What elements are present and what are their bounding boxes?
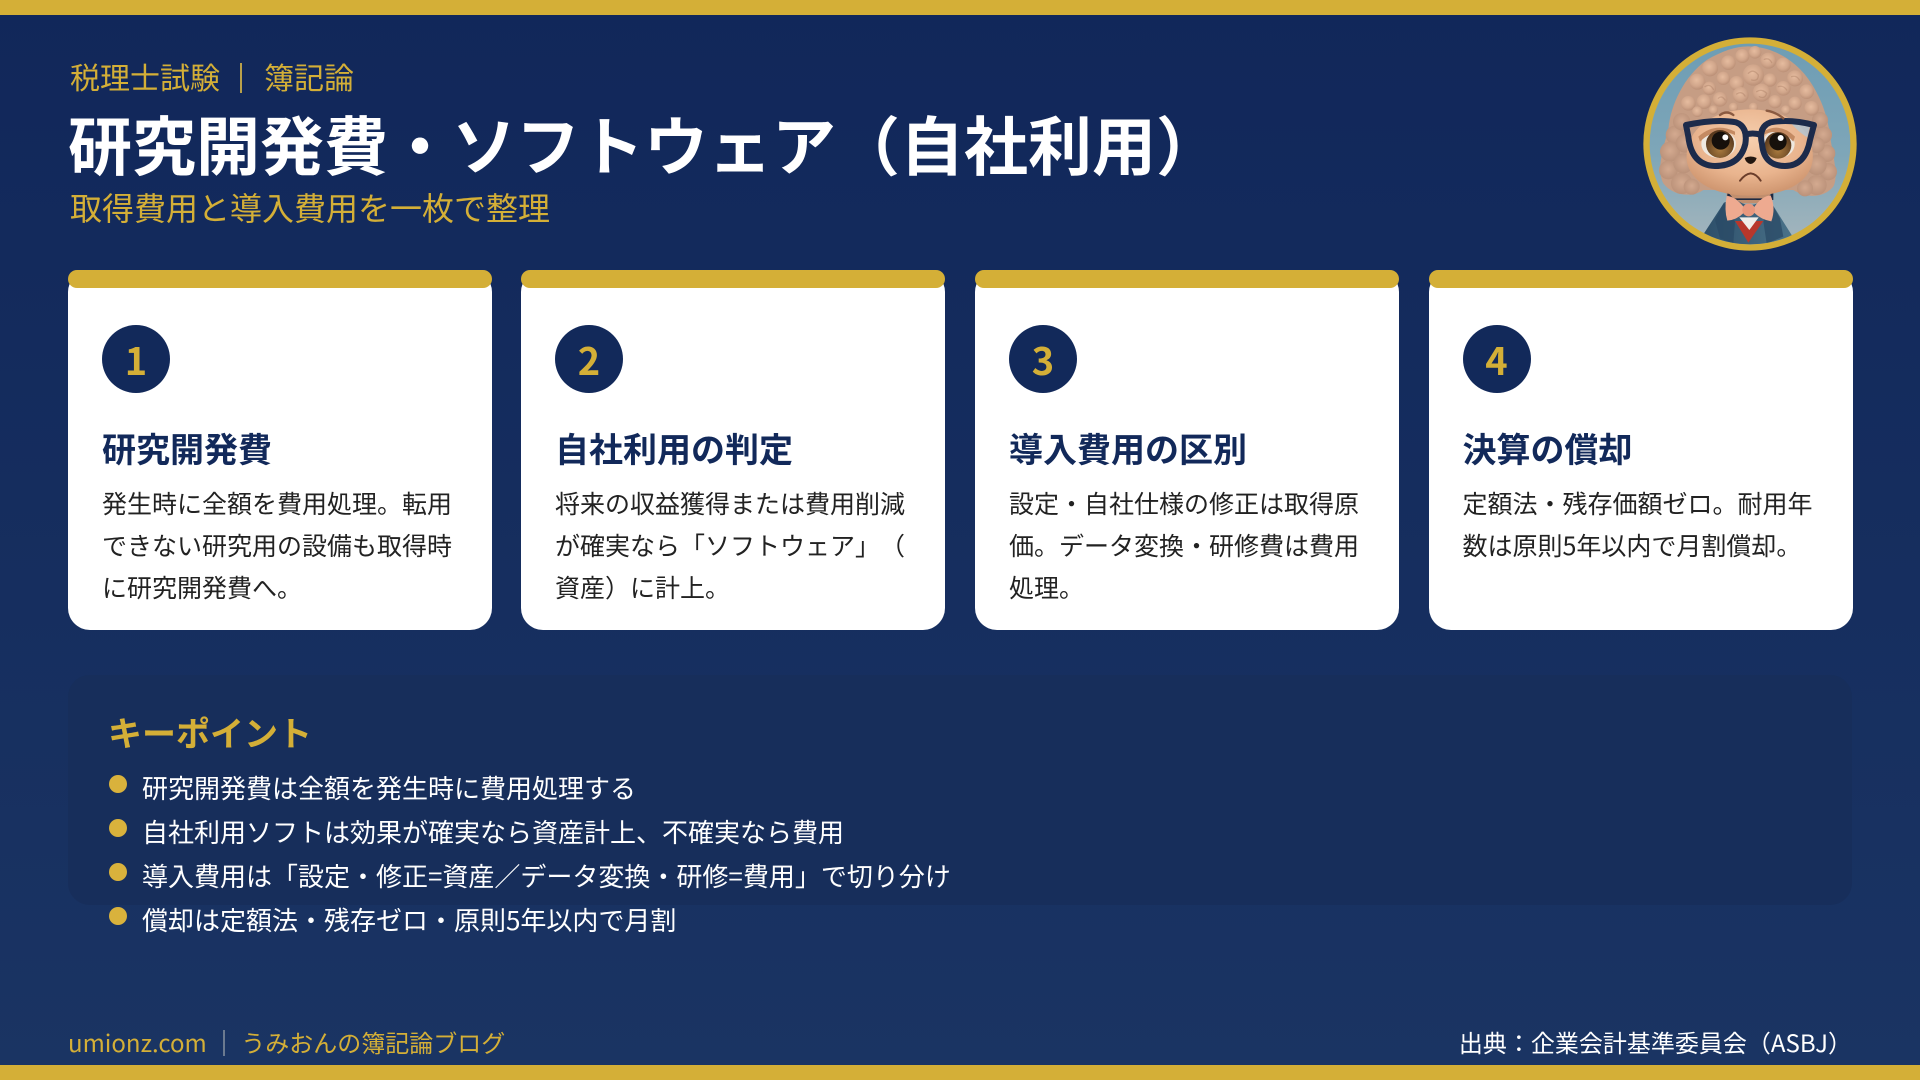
card 3 heading: 導入費用の区別: [1009, 423, 1247, 472]
glasses: [1686, 121, 1814, 166]
card 4 number: [1462, 325, 1530, 393]
card 1 heading: 研究開発費: [102, 423, 272, 472]
card 2 number: 2: [578, 331, 600, 386]
card 4: [1428, 270, 1852, 630]
brows: [1720, 111, 1783, 118]
card 2 heading: 自社利用の判定: [555, 423, 793, 472]
curl details: [1705, 59, 1799, 100]
card 3 number: 3: [1032, 331, 1054, 386]
card 3 body: 設定・自社仕様の修正は取得原: [1009, 485, 1359, 521]
card 4 body: [1462, 485, 1813, 563]
card 3: [975, 270, 1399, 630]
card 2 body: 将来の収益獲得または費用削減: [555, 485, 905, 521]
card 3 body: 処理。: [1009, 569, 1084, 605]
card 4 heading: 決算の償却: [1462, 423, 1632, 472]
key points heading: キーポイント: [108, 707, 312, 756]
card 2: [521, 270, 945, 630]
eyebrow: category label: 税理士試験 簿記論: [70, 54, 354, 98]
key point 3: [109, 857, 951, 894]
card 3 body: [1009, 485, 1359, 605]
bow tie: [1725, 195, 1774, 221]
key point 1: [109, 769, 636, 806]
text: 償却は定額法・残存ゼロ・原則5年以内で月割: [142, 901, 676, 938]
lens glare: [1792, 124, 1810, 137]
hair silhouette: [1660, 46, 1836, 196]
card 1 body: 発生時に全額を費用処理。転用: [102, 485, 452, 521]
text: 自社利用ソフトは効果が確実なら資産計上、不確実なら費用: [142, 813, 844, 850]
top gold bar: [0, 0, 1920, 15]
card 2 body: 資産）に計上。: [555, 569, 730, 605]
card 2 body: が確実なら「ソフトウェア」（: [555, 527, 905, 563]
mouth: [1740, 173, 1761, 181]
bottom gold bar: [0, 1065, 1920, 1080]
card 3 number: [1009, 325, 1077, 393]
jacket lapels: [1715, 202, 1783, 243]
card 1 number: [102, 325, 170, 393]
card 3 cap: [975, 270, 1399, 288]
icon: character portrait: [1643, 37, 1857, 251]
card 1 cap: [68, 270, 492, 288]
card 1 body: できない研究用の設備も取得時: [102, 527, 452, 563]
card 4 cap: [1428, 270, 1852, 288]
upper hair curls: [1681, 46, 1819, 117]
key point 2: [109, 813, 844, 850]
face: [1687, 109, 1813, 196]
neck: [1726, 193, 1770, 204]
title: 研究開発費・ソフトウェア（自社利用）: [68, 97, 1220, 189]
text: 研究開発費は全額を発生時に費用処理する: [142, 769, 636, 806]
card 1 body: [102, 485, 452, 605]
text: 導入費用は「設定・修正=資産／データ変換・研修=費用」で切り分け: [142, 857, 951, 894]
shirt and tie: [1735, 221, 1763, 243]
subtitle: 取得費用と導入費用を一枚で整理: [70, 184, 550, 230]
card 3 body: 価。データ変換・研修費は費用: [1009, 527, 1359, 563]
card 4 body: 定額法・残存価額ゼロ。耐用年: [1462, 485, 1813, 521]
eyes: [1701, 130, 1736, 158]
card 2 cap: [521, 270, 945, 288]
card 1 number: 1: [125, 331, 147, 386]
jacket: [1704, 198, 1792, 244]
card 2 body: [555, 485, 905, 605]
card 4 body: 数は原則5年以内で月割償却。: [1462, 527, 1801, 563]
key point 4: [109, 901, 676, 938]
lower hair curls: [1659, 112, 1837, 196]
card 1 body: に研究開発費へ。: [102, 569, 302, 605]
card 4 number: 4: [1485, 331, 1508, 386]
card 1: [68, 270, 492, 630]
footer right: source: 出典：企業会計基準委員会（ASBJ）: [1459, 1024, 1852, 1059]
card 2 number: [555, 325, 623, 393]
footer left: site: umionz.com うみおんの簿記論ブログ: [68, 1024, 505, 1059]
nose: [1745, 156, 1757, 164]
panel: key points background: [68, 675, 1852, 905]
